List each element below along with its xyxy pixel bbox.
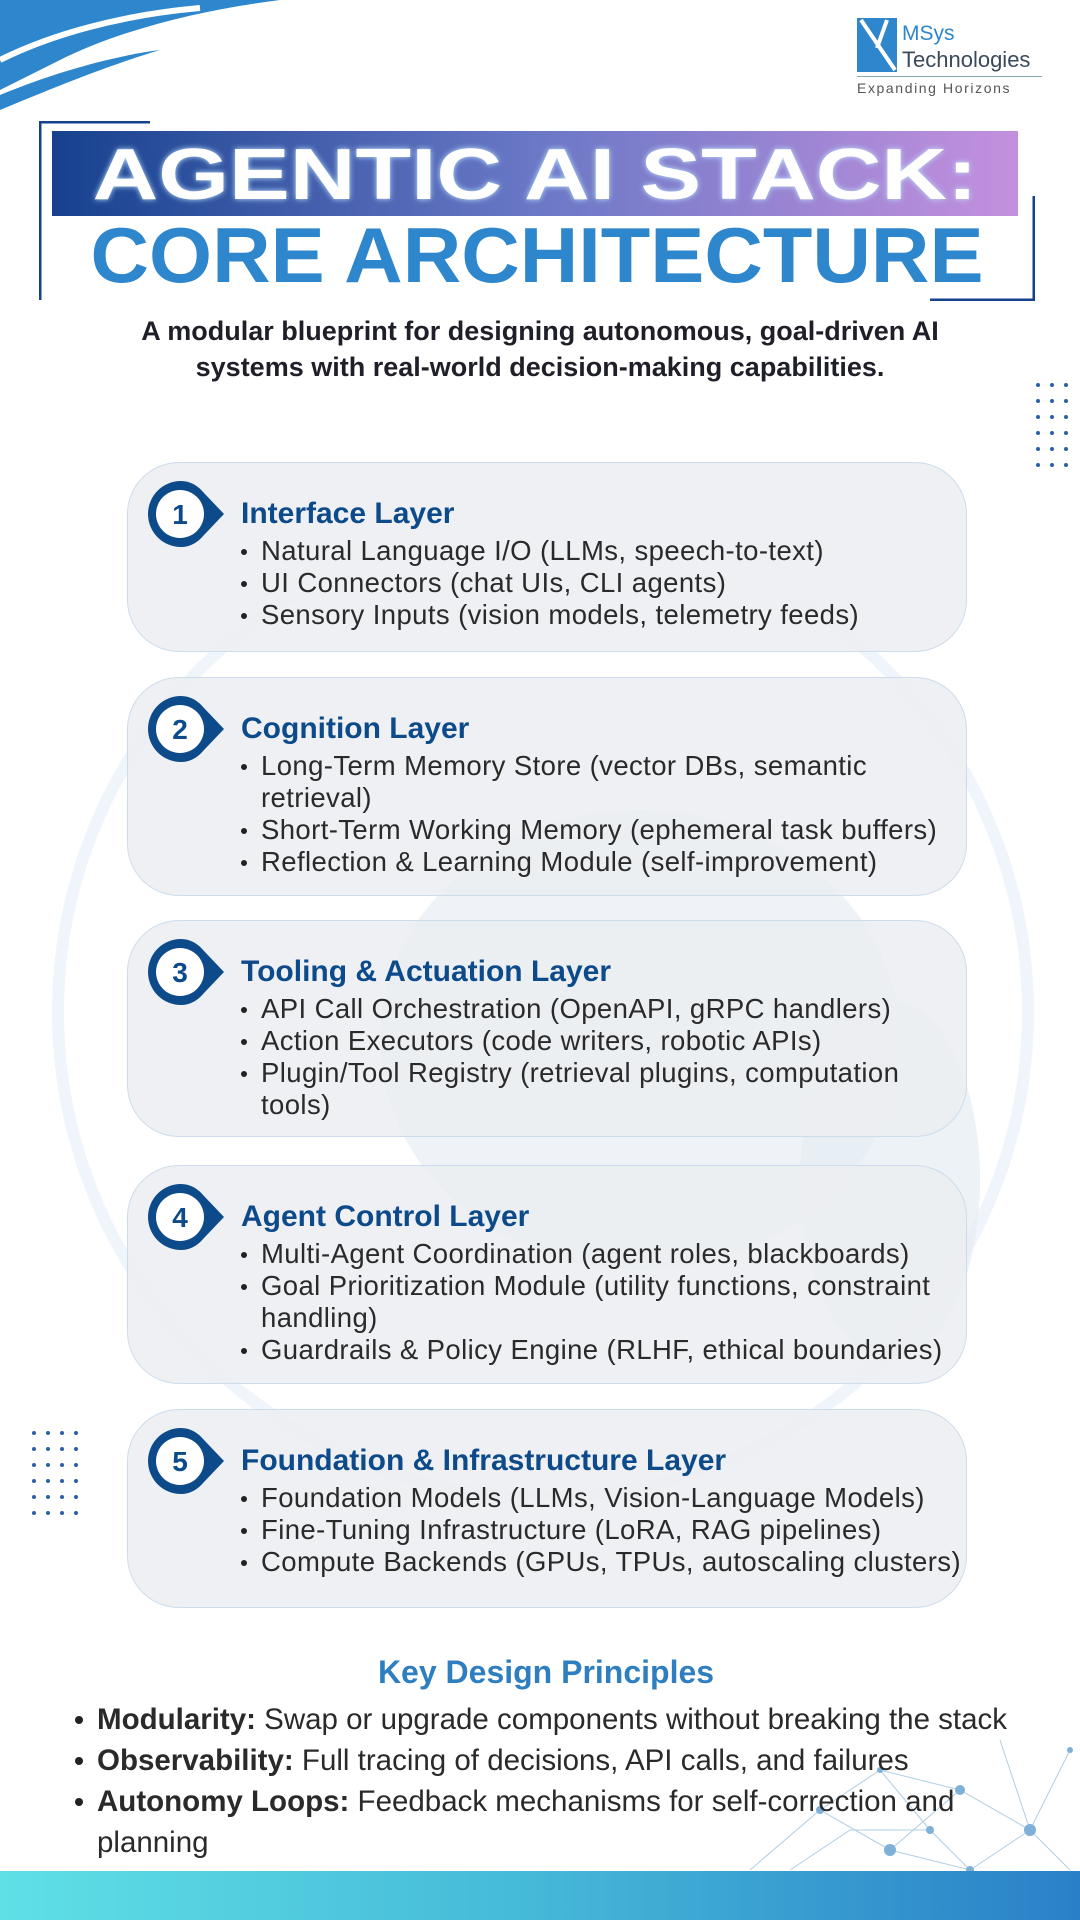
decorative top-left waves xyxy=(0,0,280,110)
bullets: Short-Term Working Memory (ephemeral task buffers) xyxy=(261,814,937,845)
bullets xyxy=(241,1482,961,1577)
bullets: handling) xyxy=(261,1302,378,1333)
panel: cognition layer xyxy=(127,677,967,896)
title: AGENTIC AI STACK: xyxy=(92,135,978,215)
badge 3: 3 xyxy=(172,957,188,988)
bullets: Long-Term Memory Store (vector DBs, semantic xyxy=(261,750,867,781)
bullets xyxy=(241,535,859,630)
heading: Agent Control Layer xyxy=(241,1200,529,1233)
bullets: Action Executors (code writers, robotic APIs) xyxy=(261,1025,822,1056)
bullets xyxy=(241,993,899,1120)
principles list: Autonomy Loops: Feedback mechanisms for self-correction and planning xyxy=(97,1785,954,1859)
bullets: Goal Prioritization Module (utility functions, constraint xyxy=(261,1270,930,1301)
principles list xyxy=(75,1703,1007,1859)
dots right xyxy=(1036,383,1068,467)
heading: key design principles: Key Design Principles xyxy=(378,1654,714,1690)
bullets: API Call Orchestration (OpenAPI, gRPC handlers) xyxy=(261,993,891,1024)
bullets: Natural Language I/O (LLMs, speech-to-text) xyxy=(261,535,824,566)
subtitle xyxy=(141,316,939,382)
subtitle: A modular blueprint for designing autonomous, goal-driven AI xyxy=(141,316,939,346)
bullets: retrieval) xyxy=(261,782,372,813)
logo: Expanding Horizons xyxy=(857,80,1011,96)
background robot watermark xyxy=(52,652,1034,1409)
bullets: Fine-Tuning Infrastructure (LoRA, RAG pipelines) xyxy=(261,1514,881,1545)
heading: Foundation & Infrastructure Layer xyxy=(241,1444,726,1477)
bullets: Sensory Inputs (vision models, telemetry feeds) xyxy=(261,599,859,630)
title: CORE ARCHITECTURE xyxy=(90,211,984,299)
heading: Cognition Layer xyxy=(241,712,469,745)
title: AGENTIC AI STACK: xyxy=(92,135,978,215)
bullets: Plugin/Tool Registry (retrieval plugins, computation xyxy=(261,1057,899,1088)
bullets: tools) xyxy=(261,1089,331,1120)
bullets xyxy=(241,750,937,877)
title xyxy=(39,121,1035,301)
badge 5: 5 xyxy=(172,1446,188,1477)
network decoration xyxy=(750,1740,1073,1871)
badge 1 xyxy=(148,481,224,547)
heading: Interface Layer xyxy=(241,497,454,530)
badge 1: 1 xyxy=(172,499,188,530)
logo xyxy=(857,18,1042,96)
bullets: Multi-Agent Coordination (agent roles, blackboards) xyxy=(261,1238,910,1269)
badge 2 xyxy=(148,696,224,762)
panel: agent control layer xyxy=(127,1165,967,1384)
panel: interface layer xyxy=(127,462,967,652)
subtitle: systems with real-world decision-making capabilities. xyxy=(196,352,884,382)
bullets xyxy=(241,1238,943,1365)
principles list: Modularity: Swap or upgrade components without breaking the stack xyxy=(97,1703,1007,1736)
bullets: UI Connectors (chat UIs, CLI agents) xyxy=(261,567,726,598)
badge 3 xyxy=(148,939,224,1005)
bullets: Reflection & Learning Module (self-improvement) xyxy=(261,846,877,877)
bullets: Guardrails & Policy Engine (RLHF, ethical boundaries) xyxy=(261,1334,943,1365)
bullets: Compute Backends (GPUs, TPUs, autoscaling clusters) xyxy=(261,1546,961,1577)
panel: foundation layer xyxy=(127,1409,967,1608)
badge 5 xyxy=(148,1428,224,1494)
principles list: Observability: Full tracing of decisions, API calls, and failures xyxy=(97,1744,909,1777)
heading: Tooling & Actuation Layer xyxy=(241,955,611,988)
bullets: Foundation Models (LLMs, Vision-Language Models) xyxy=(261,1482,925,1513)
logo: Technologies xyxy=(902,47,1030,72)
badge 2: 2 xyxy=(172,714,188,745)
badge 4 xyxy=(148,1184,224,1250)
panel: tooling layer xyxy=(127,920,967,1137)
badge 4: 4 xyxy=(172,1202,188,1233)
dots left xyxy=(32,1431,78,1515)
bottom bar xyxy=(0,1871,1080,1920)
logo: MSys xyxy=(902,22,954,45)
